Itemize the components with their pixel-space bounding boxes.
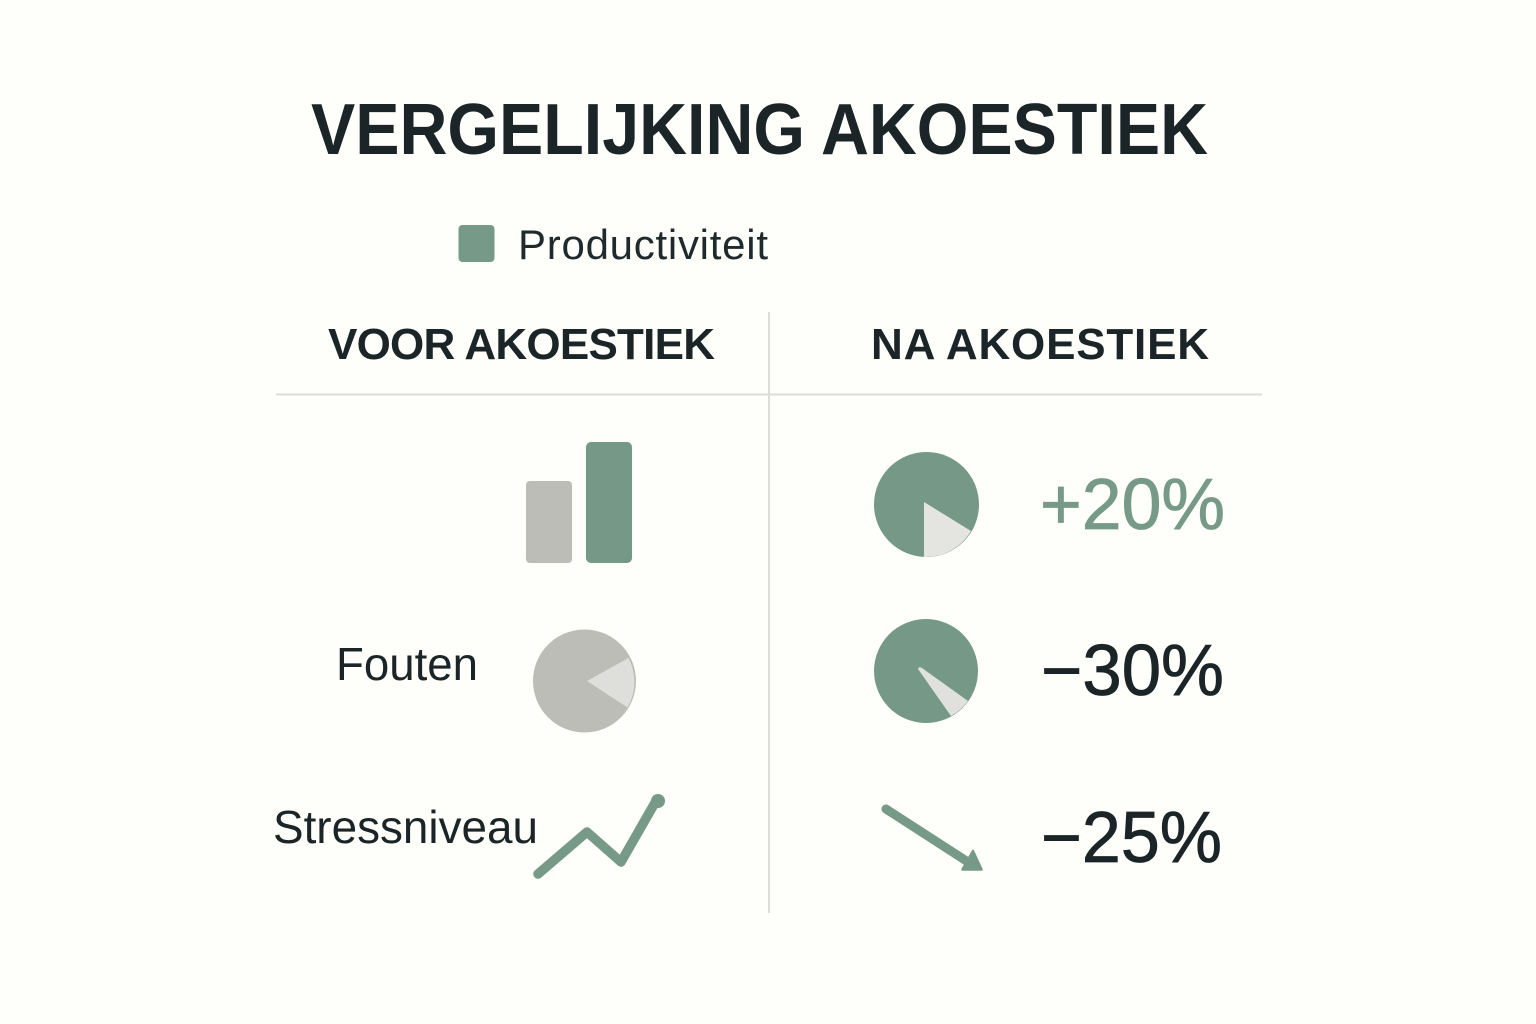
pie chart: fouten voor [533, 630, 636, 732]
column heading: na akoestiek: NA AKOESTIEK [871, 320, 1209, 369]
pie chart: productiviteit na [874, 452, 979, 557]
value: -25%: −25% [1041, 798, 1222, 878]
pie chart: fouten na [874, 619, 978, 723]
label: fouten: Fouten [336, 638, 478, 690]
label: stressniveau: Stressniveau [273, 801, 538, 853]
title: VERGELIJKING AKOESTIEK [311, 90, 1208, 170]
icon: falling stress arrow [886, 809, 982, 870]
value: +20%: +20% [1040, 465, 1225, 545]
icon: rising stress line [538, 794, 665, 874]
legend: productiviteit: Productiviteit [518, 221, 768, 268]
icon: bar chart before and after [526, 442, 632, 563]
value: -30%: −30% [1041, 631, 1224, 711]
column heading: voor akoestiek: VOOR AKOESTIEK [328, 320, 715, 369]
